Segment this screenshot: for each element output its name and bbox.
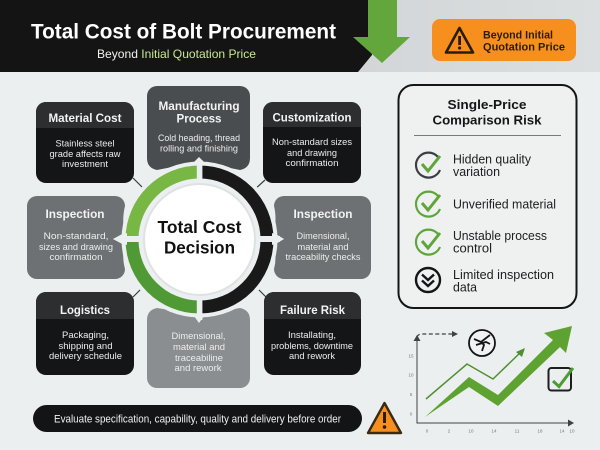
card: inspection right: Inspection [294,207,352,221]
connector lines [133,178,266,297]
ring: total cost decision [113,160,284,320]
panel: single-price comparison risk [398,85,576,308]
ring segment: black upper [200,166,274,239]
item: unstable process control: control [453,242,492,256]
card: inspection right: material and [298,242,348,252]
icon: check green [416,192,440,217]
card: customization: and drawing [287,148,337,158]
title: Total Cost of Bolt Procurement [31,20,336,44]
card: inspection right: traceability checks [286,252,361,262]
x axis labels: 10 [468,428,474,434]
card: customization [263,102,361,183]
item: unverified material: Unverified material [453,198,556,212]
card: bottom traceability: and rework [174,363,222,373]
chart axes [414,335,574,426]
card: inspection left: Non-standard, [44,231,108,241]
card: manufacturing process: Manufacturing [158,99,240,113]
card: customization: Customization [272,110,352,124]
center label [158,217,242,258]
x axis labels: 18 [537,428,543,434]
card: failure risk: problems, downtime [271,341,353,351]
item: unstable process control: Unstable process [453,229,547,243]
card: material cost: investment [62,159,108,169]
item: hidden quality variation: variation [453,165,500,179]
card: logistics: shipping and [58,341,112,351]
center label: Decision [164,238,235,258]
card: logistics: Logistics [60,303,110,317]
card: manufacturing process: Process [176,112,222,126]
panel heading [432,97,542,128]
ring segment: light green [126,165,200,239]
line chart [408,326,575,434]
card: logistics [36,292,134,375]
x axis labels [426,428,575,434]
card: inspection left: sizes and drawing [39,242,113,252]
card: failure risk: and rework [289,351,335,361]
card: logistics: Packaging, [62,330,109,340]
card: bottom traceability: material and [173,342,225,352]
panel heading: Single-Price [448,97,526,112]
badge: beyond initial quotation price: Beyond Initial [483,30,553,42]
card: customization: confirmation [286,158,338,168]
card: logistics: delivery schedule [49,351,122,361]
icon: checkbox [548,368,573,390]
x axis labels: 14 [491,428,497,434]
footer bar: Evaluate specification, capability, quality and delivery before order [54,414,341,426]
card: manufacturing process: Cold heading, thread [158,133,240,143]
x axis labels: 14 [559,428,565,434]
card: inspection right: Dimensional, [296,231,350,241]
icon: circled bolt symbol [469,330,495,356]
card: manufacturing process: rolling and finishing [160,144,238,154]
icon: footer warning triangle [368,403,401,433]
y axis labels: 15 [408,354,414,358]
badge: beyond initial quotation price: Quotation Price [483,42,565,54]
icon: check dark [416,153,440,178]
ring segment: dark green [126,240,200,314]
badge: beyond initial quotation price [432,19,576,61]
center disc [144,184,255,295]
panel heading: Comparison Risk [432,112,542,128]
item: limited inspection data: Limited inspection [453,268,554,282]
header band [0,0,372,72]
item: hidden quality variation: Hidden quality [453,152,532,166]
card: failure risk: Installating, [288,330,336,340]
item: hidden quality variation [453,152,532,179]
center label: Total Cost [158,217,242,237]
x axis labels: 2 [448,428,451,434]
ring segment: black lower [200,240,274,314]
card: failure risk: Failure Risk [280,303,345,317]
card: failure risk [264,292,361,375]
x axis labels: 10 [569,428,575,434]
card: bottom traceability [147,308,250,388]
icon: green down arrow [353,0,410,63]
thick green arrow [425,326,572,417]
card: manufacturing process [147,86,250,170]
card: bottom traceability: traceabiline [175,353,223,363]
icon: check green [416,230,440,255]
item: limited inspection data [453,268,554,294]
card: bottom traceability: Dimensional, [172,331,226,341]
card: material cost: Material Cost [48,111,122,125]
y axis labels: 0 [410,412,413,416]
card: material cost: Stainless steel [56,138,114,148]
card: inspection left: Inspection [46,207,104,221]
y axis labels: 5 [410,392,413,397]
footer bar [33,405,362,432]
icon: warning triangle [446,28,473,52]
card: inspection left: confirmation [50,252,102,262]
y axis labels [408,354,414,416]
card: material cost [36,102,134,183]
x axis labels: 11 [515,428,520,434]
card: material cost: grade affects raw [50,149,121,159]
item: limited inspection data: data [453,280,477,294]
icon: double chevron [416,268,440,292]
card: inspection right [274,196,371,279]
y axis labels: 10 [408,372,414,378]
item: unstable process control [453,229,547,256]
dashed arrow [417,331,458,337]
subtitle: Beyond Initial Quotation Price [97,47,256,61]
x axis labels: 0 [426,428,429,434]
card: inspection left [27,196,125,279]
thin green arrow [426,348,525,399]
card: customization: Non-standard sizes [272,137,352,147]
